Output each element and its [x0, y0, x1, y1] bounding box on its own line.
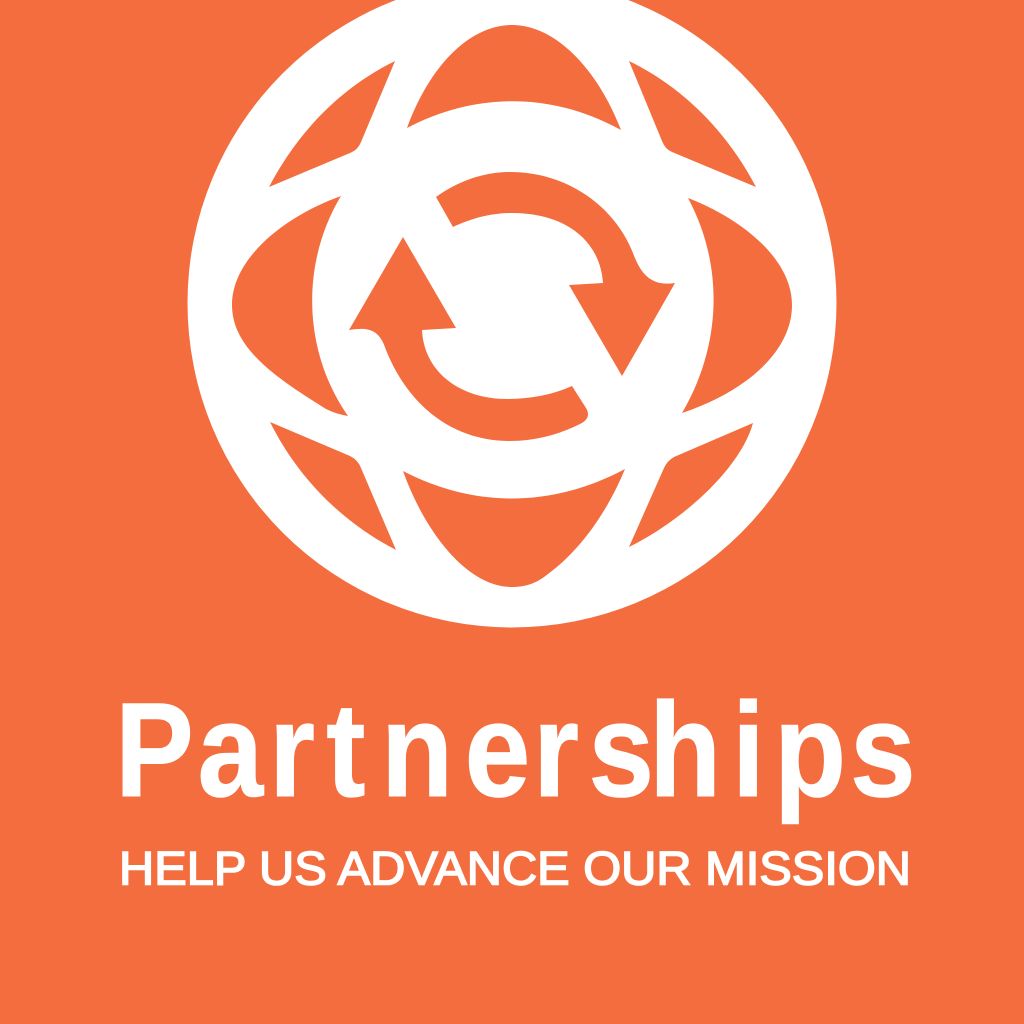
globe cutout: right: [682, 198, 792, 413]
title: Partnerships: [115, 675, 916, 825]
icon: lower arrow: [349, 237, 588, 441]
globe cutout: top right: [629, 61, 756, 187]
icon: upper arrow: [436, 172, 675, 376]
globe cutout: bottom right: [629, 423, 753, 547]
globe cutout: bottom: [403, 469, 625, 587]
icon: globe with partnership arrows: [188, 0, 836, 628]
subtitle: HELP US ADVANCE OUR MISSION: [119, 842, 911, 894]
globe cutout: top: [407, 25, 621, 130]
globe cutout: top left: [269, 61, 395, 187]
globe cutout: bottom left: [270, 422, 396, 550]
globe cutout: left: [232, 196, 348, 416]
